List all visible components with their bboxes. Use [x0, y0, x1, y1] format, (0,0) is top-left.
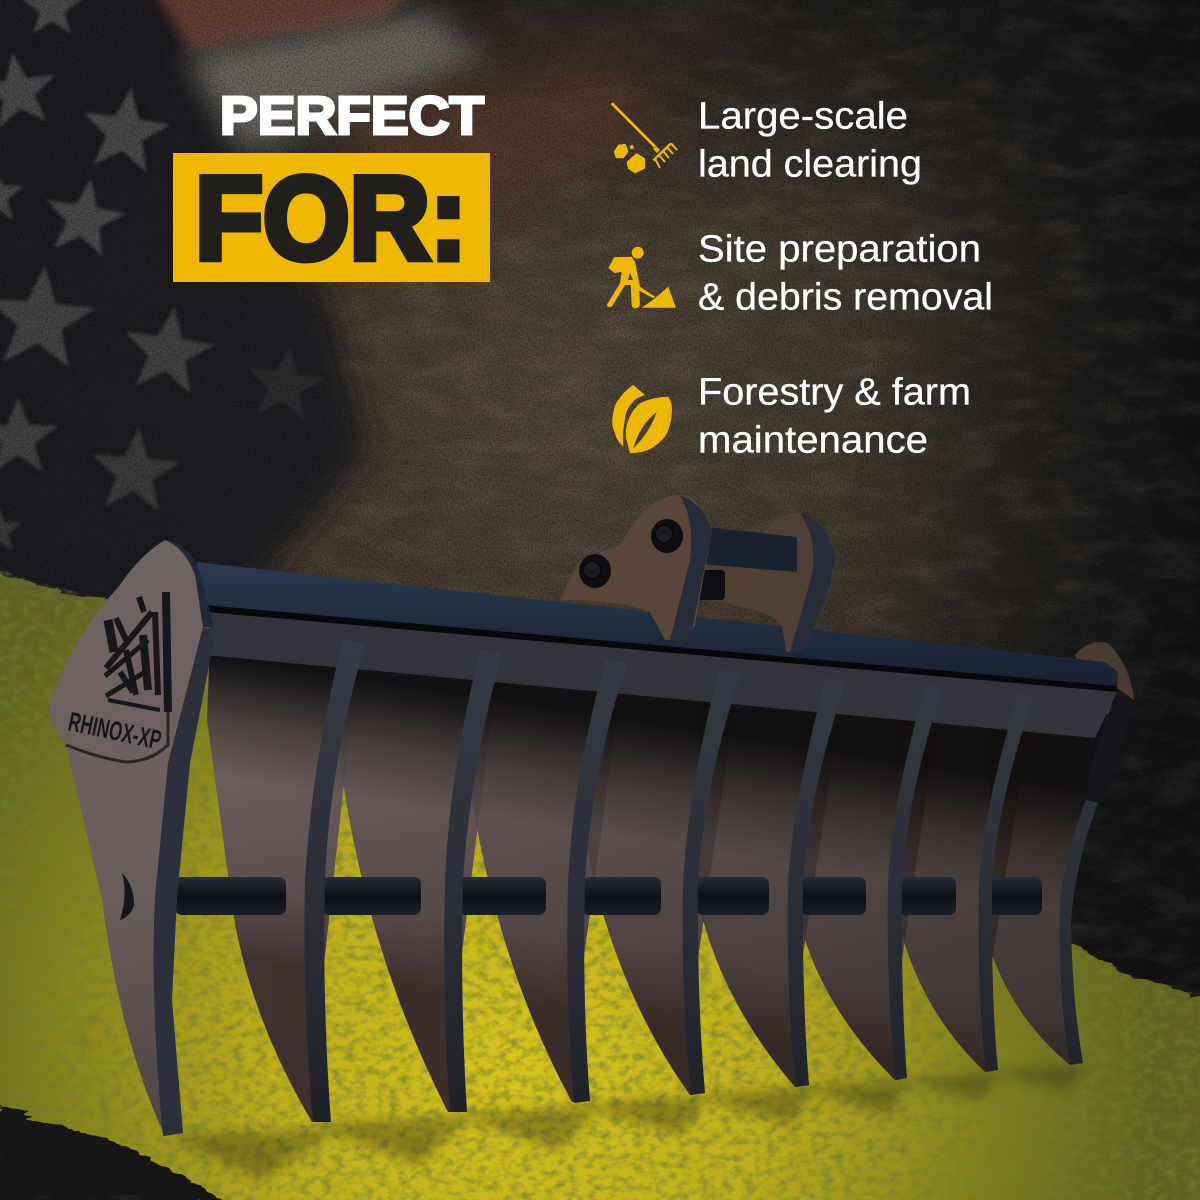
- left ear: [560, 495, 712, 640]
- top beam: [196, 562, 1118, 690]
- text: Site preparation and debris removal: Site preparation: [698, 228, 981, 270]
- text: Large-scale land clearing: land clearing: [698, 144, 922, 186]
- axle bar: [175, 877, 1042, 915]
- icon: rake and rocks: [612, 103, 677, 172]
- front tooth edges: [304, 640, 1098, 1122]
- text: Forestry and farm maintenance: maintenance: [698, 420, 928, 462]
- upper pin: [700, 527, 797, 572]
- rake attachment: [50, 495, 1134, 1180]
- plate rim: [165, 540, 214, 628]
- heading: FOR badge: FOR:: [195, 153, 467, 285]
- item: forestry and farm: [612, 372, 971, 462]
- logo cut-out mark: [105, 592, 168, 712]
- background: faded American flag: [0, 0, 760, 640]
- lower ledge plate: [205, 612, 1117, 738]
- plate bolt notch: [120, 873, 134, 920]
- text: Forestry and farm maintenance: [698, 372, 971, 462]
- lower pin: [695, 570, 725, 600]
- left end plate with logo: [50, 540, 216, 1136]
- mounting bracket: [560, 495, 835, 652]
- plate front edge: [154, 627, 216, 1136]
- icon: leaves: [612, 385, 672, 453]
- text: Large-scale land clearing: [698, 96, 922, 186]
- shadow under teeth: [170, 1064, 1085, 1180]
- right end plate: [1075, 642, 1134, 803]
- text: Large-scale land clearing: Large-scale: [698, 96, 908, 138]
- text: Site preparation and debris removal: & debris removal: [698, 276, 993, 318]
- text: Site preparation and debris removal: [698, 228, 993, 318]
- background: yellow painted brush stroke: [0, 560, 1200, 1200]
- heading: PERFECT: PERFECT: [220, 86, 484, 146]
- item: site preparation: [607, 228, 993, 318]
- bracket bolts: [579, 519, 683, 588]
- plate step shadow: [66, 712, 168, 762]
- right ear: [695, 513, 835, 652]
- text: Forestry and farm maintenance: Forestry & farm: [698, 372, 971, 414]
- logo wordmark: RHINOX-XP: [66, 707, 164, 755]
- beam shadow line: [205, 605, 1117, 692]
- icon: worker with shovel: [607, 247, 676, 308]
- item: land clearing: [612, 96, 922, 186]
- rear webs of the teeth: [207, 640, 1110, 1122]
